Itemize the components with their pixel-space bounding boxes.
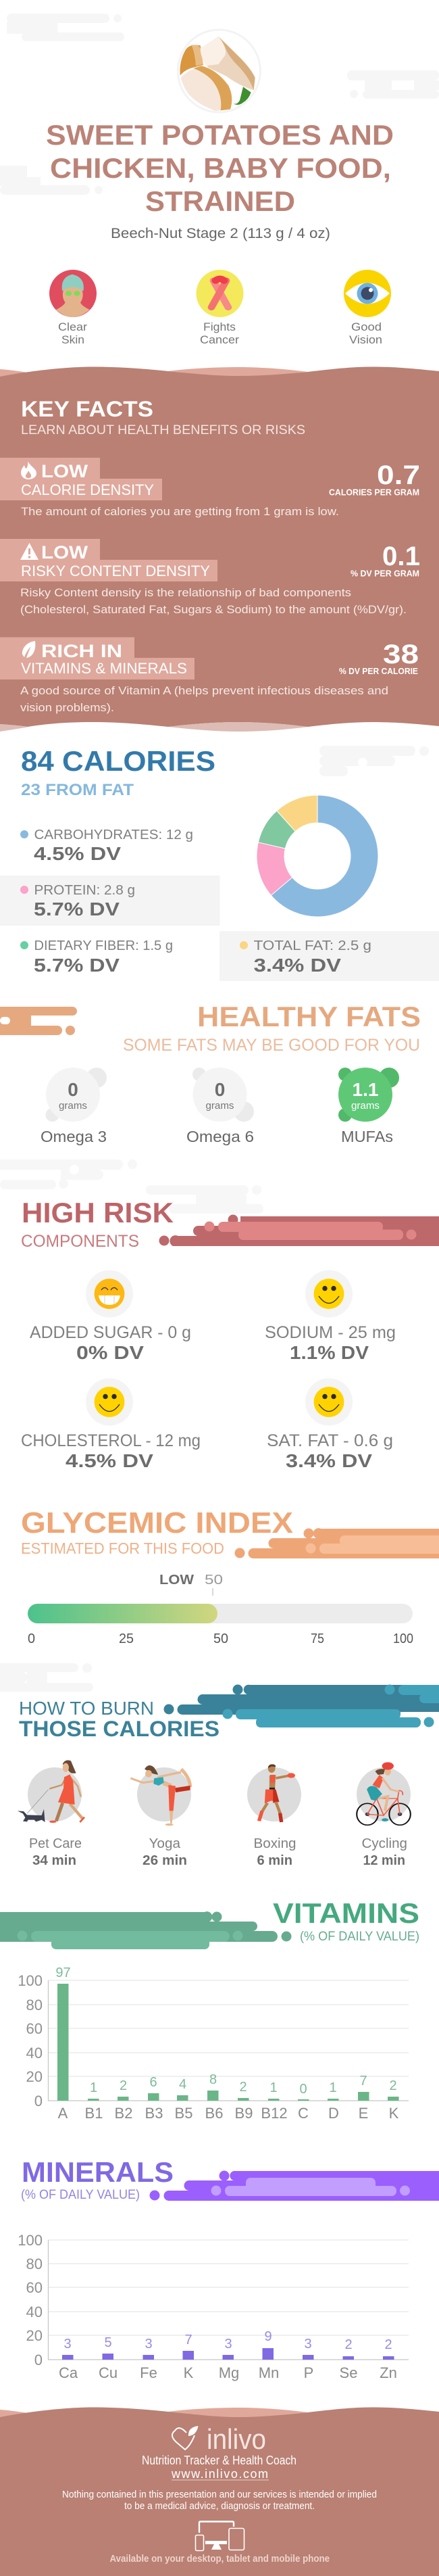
bar chart: minerals: 100 [18, 2232, 43, 2249]
benefit: fights cancer [196, 270, 243, 346]
bar chart: minerals: Zn [380, 2364, 397, 2381]
legend: dietary fiber: DIETARY FIBER: 1.5 g [34, 938, 173, 953]
bar chart: vitamins: 60 [26, 2020, 43, 2037]
heading: high risk: HIGH RISK [22, 1197, 174, 1229]
bar chart: vitamins: B2 [115, 2105, 132, 2122]
bar chart: vitamins: 1 [90, 2080, 97, 2095]
bar chart: vitamins: B12 [261, 2105, 288, 2122]
bar chart: vitamins: A [58, 2105, 68, 2122]
legend: carbohydrates: CARBOHYDRATES: 12 g [34, 828, 193, 842]
bar chart: minerals: P [304, 2364, 313, 2381]
activity: pet care [18, 1760, 84, 1868]
bar chart: minerals: 0 [34, 2352, 43, 2368]
benefit: good vision: Good [351, 320, 382, 333]
bar chart: minerals: K [184, 2364, 194, 2381]
bar chart: vitamins: 6 [149, 2075, 157, 2090]
fat: MUFAs: grams [351, 1100, 380, 1112]
bar chart: vitamins: 4 [179, 2077, 186, 2092]
logo: inlivo: inlivo [207, 2423, 266, 2455]
bar chart: vitamins: 97 [55, 1965, 71, 1980]
title: CHICKEN, BABY FOOD, [50, 152, 391, 184]
fact: calorie density [0, 458, 420, 518]
gauge: glycemic index: 75 [311, 1631, 324, 1646]
tagline: Nutrition Tracker & Health Coach [142, 2454, 296, 2467]
risk: cholesterol: 4.5% DV [66, 1450, 153, 1471]
heading: glycemic index: GLYCEMIC INDEX [21, 1506, 293, 1540]
bar chart: minerals: 3 [304, 2337, 312, 2352]
fact: risky content density: RISKY CONTENT DENSITY [21, 563, 210, 579]
bar chart: vitamins [18, 1965, 409, 2122]
bar chart: minerals: Ca [59, 2364, 78, 2381]
activity: boxing: Boxing [254, 1836, 296, 1851]
fat: omega 6: 0 [215, 1079, 225, 1100]
heading: how to burn: HOW TO BURN [19, 1698, 154, 1719]
legend: total fat: TOTAL FAT: 2.5 g [254, 938, 371, 953]
fact: risky content density: LOW [41, 542, 88, 563]
bar chart: vitamins: 0 [299, 2082, 307, 2097]
benefit: good vision: Vision [349, 333, 382, 346]
subheading: healthy fats: SOME FATS MAY BE GOOD FOR YOU [123, 1036, 420, 1055]
fact: calorie density: The amount of calories you are getting from 1 gram is low. [21, 505, 339, 518]
activity: cycling: 12 min [363, 1853, 405, 1868]
bar chart: vitamins: D [328, 2105, 339, 2122]
bar chart: vitamins: 80 [26, 1997, 43, 2013]
bar chart: vitamins: B5 [175, 2105, 192, 2122]
heading: those calories: THOSE CALORIES [19, 1717, 220, 1741]
activity: pet care: Pet Care [29, 1836, 82, 1851]
logo: inlivo [172, 2423, 266, 2455]
key facts subheading: LEARN ABOUT HEALTH BENEFITS OR RISKS [21, 423, 305, 437]
subheading: components: COMPONENTS [21, 1232, 139, 1251]
fact: rich in vitamins and minerals: A good source of Vitamin A (helps prevent infectious diseases and [20, 684, 388, 697]
subheading: vitamins daily value: (% OF DAILY VALUE) [300, 1930, 419, 1944]
benefit: clear skin: Clear [58, 320, 87, 333]
bar chart: vitamins: B6 [205, 2105, 223, 2122]
title: SWEET POTATOES AND [46, 119, 394, 151]
risk: sodium: SODIUM - 25 mg [265, 1323, 396, 1342]
subheading: minerals daily value: (% OF DAILY VALUE) [21, 2188, 140, 2202]
fact: calorie density: CALORIE DENSITY [21, 481, 154, 498]
risk: sodium: 1.1% DV [290, 1342, 369, 1363]
fact: calorie density: CALORIES PER GRAM [329, 487, 419, 498]
fat: omega 6: Omega 6 [186, 1128, 254, 1145]
disclaimer: to be a medical advice, diagnosis or treatment. [124, 2500, 315, 2512]
risk: saturated fat: 3.4% DV [286, 1450, 372, 1471]
heading: healthy fats: HEALTHY FATS [197, 1001, 421, 1032]
legend: protein: PROTEIN: 2.8 g [34, 883, 135, 898]
bar chart: minerals: Se [340, 2364, 357, 2381]
disclaimer [62, 2489, 377, 2512]
icon: devices [196, 2522, 244, 2550]
fat: omega 3 [41, 1068, 107, 1145]
bar chart: vitamins: C [298, 2105, 309, 2122]
decoration: vitamins band [0, 1911, 292, 1949]
decoration: glycemic band [235, 1528, 439, 1558]
benefit: fights cancer: Fights [203, 320, 236, 333]
fact: risky content density: (Cholesterol, Saturated Fat, Sugars & Sodium) to the amount (%DV/gr). [20, 603, 407, 616]
fact: calorie density: LOW [41, 461, 88, 481]
fat: MUFAs: 1.1 [353, 1079, 378, 1100]
bar chart: minerals: Mn [259, 2364, 279, 2381]
donut chart: macronutrients [257, 795, 378, 917]
bar chart: minerals: 5 [104, 2335, 112, 2350]
fat: omega 3: 0 [68, 1079, 78, 1100]
legend: total fat: 3.4% DV [254, 955, 341, 976]
benefit: clear skin: Skin [61, 333, 84, 346]
bar chart: vitamins: 40 [26, 2045, 43, 2061]
legend: carbohydrates: 4.5% DV [34, 843, 121, 864]
fat: omega 3: Omega 3 [41, 1128, 107, 1145]
bar chart: minerals: 3 [63, 2337, 72, 2352]
bar chart: minerals: 40 [26, 2304, 43, 2320]
activity: cycling: Cycling [362, 1836, 407, 1851]
legend: dietary fiber: 5.7% DV [34, 955, 120, 976]
heading: calories: 84 CALORIES [21, 745, 215, 777]
fact: risky content density: 0.1 [382, 542, 420, 571]
food photo [178, 30, 260, 112]
activity: pet care: 34 min [32, 1853, 76, 1868]
risk: cholesterol [21, 1378, 201, 1471]
bar chart: minerals: 60 [26, 2279, 43, 2296]
bar chart: vitamins: 1 [329, 2080, 337, 2095]
legend: carbohydrates [20, 828, 193, 864]
gauge: glycemic index [28, 1573, 413, 1646]
fact: rich in vitamins and minerals [0, 637, 419, 714]
bar chart: vitamins: 100 [18, 1972, 43, 1989]
risk: added sugar: ADDED SUGAR - 0 g [30, 1323, 191, 1342]
bar chart: minerals [18, 2232, 409, 2381]
bar chart: vitamins: 20 [26, 2068, 43, 2085]
legend: protein: 5.7% DV [34, 899, 120, 920]
bar chart: vitamins: 2 [389, 2078, 397, 2093]
bar chart: minerals: 2 [384, 2337, 392, 2352]
bar chart: minerals: 20 [26, 2327, 43, 2344]
fat: MUFAs: MUFAs [341, 1128, 393, 1145]
bar chart: vitamins: 8 [209, 2072, 217, 2087]
activity: yoga: 26 min [143, 1853, 187, 1868]
decoration: high risk band [159, 1214, 439, 1246]
benefit: clear skin [49, 270, 97, 346]
decoration: healthy fats band [0, 1007, 77, 1035]
website link: www.inlivo.com [171, 2467, 268, 2481]
activity: boxing [247, 1764, 301, 1868]
bar chart: minerals: 3 [145, 2337, 153, 2352]
fact: rich in vitamins and minerals: RICH IN [41, 641, 122, 661]
footer panel [0, 2407, 439, 2576]
title: STRAINED [145, 185, 295, 217]
activity: cycling [357, 1762, 411, 1868]
bar chart: vitamins: 2 [120, 2078, 127, 2093]
bar chart: vitamins: B9 [235, 2105, 253, 2122]
subtitle: Beech-Nut Stage 2 (113 g / 4 oz) [111, 226, 330, 241]
risk: sodium [265, 1270, 396, 1363]
risk: saturated fat: SAT. FAT - 0.6 g [267, 1431, 393, 1450]
heading: vitamins: VITAMINS [273, 1897, 419, 1929]
activity: boxing: 6 min [257, 1853, 292, 1868]
bar chart: vitamins: E [359, 2105, 368, 2122]
fat: omega 3: grams [59, 1100, 87, 1112]
disclaimer: Nothing contained in this presentation and our services is intended or implied [62, 2489, 377, 2500]
bar chart: minerals: 7 [184, 2333, 192, 2347]
panel: key facts [0, 366, 439, 732]
risk: cholesterol: CHOLESTEROL - 12 mg [21, 1431, 201, 1450]
legend: protein [0, 876, 220, 926]
fact: rich in vitamins and minerals: vision problems). [20, 701, 114, 714]
decoration: burn band [163, 1685, 439, 1727]
bar chart: minerals: Cu [99, 2364, 118, 2381]
benefit: fights cancer: Cancer [200, 333, 239, 346]
key facts heading: KEY FACTS [21, 397, 153, 421]
subheading: calories from fat: 23 FROM FAT [21, 781, 134, 799]
fact: rich in vitamins and minerals: % DV PER CALORIE [339, 666, 418, 676]
bar chart: vitamins: 0 [34, 2093, 43, 2109]
bar chart: minerals: Fe [140, 2364, 157, 2381]
bar chart: vitamins: B3 [145, 2105, 163, 2122]
bar chart: minerals: 9 [264, 2329, 272, 2344]
bar chart: minerals: 2 [344, 2337, 353, 2352]
gauge: glycemic index: 100 [393, 1631, 413, 1646]
fat: omega 6 [186, 1068, 254, 1145]
gauge: glycemic index: 0 [28, 1631, 35, 1646]
gauge: glycemic index: 25 [119, 1631, 134, 1646]
heading: minerals: MINERALS [22, 2156, 174, 2188]
bar chart: vitamins: K [389, 2105, 399, 2122]
bar chart: vitamins: 2 [239, 2080, 247, 2095]
fact: risky content density: Risky Content density is the relationship of bad components [20, 586, 351, 599]
fat: omega 6: grams [205, 1100, 234, 1112]
activity: yoga [130, 1765, 191, 1868]
risk: saturated fat [267, 1378, 393, 1471]
legend: total fat [220, 931, 439, 981]
bar chart: vitamins: 1 [269, 2080, 278, 2095]
fact: calorie density: 0.7 [377, 460, 420, 490]
gauge: glycemic index: LOW [159, 1573, 194, 1588]
fact: risky content density: % DV PER GRAM [351, 568, 419, 579]
bar chart: vitamins: 7 [359, 2074, 367, 2089]
gauge: glycemic index: 50 [205, 1573, 223, 1588]
benefit: good vision [344, 270, 391, 346]
bar chart: minerals: 80 [26, 2256, 43, 2272]
bar chart: vitamins: B1 [85, 2105, 103, 2122]
risk: added sugar [30, 1270, 191, 1363]
bar chart: minerals: Mg [219, 2364, 239, 2381]
activity: yoga: Yoga [149, 1836, 181, 1851]
availability note: Available on your desktop, tablet and mobile phone [109, 2553, 330, 2565]
fact: risky content density [0, 539, 420, 616]
title [46, 119, 394, 217]
gauge: glycemic index: 50 [213, 1631, 228, 1646]
fact: rich in vitamins and minerals: VITAMINS & MINERALS [21, 660, 187, 677]
bar chart: minerals: 3 [224, 2337, 232, 2352]
risk: added sugar: 0% DV [76, 1342, 144, 1363]
decoration: minerals band [150, 2170, 439, 2201]
legend: dietary fiber [20, 938, 173, 976]
fact: rich in vitamins and minerals: 38 [383, 640, 419, 669]
subheading: estimated: ESTIMATED FOR THIS FOOD [21, 1540, 224, 1557]
fat: MUFAs [338, 1068, 399, 1145]
